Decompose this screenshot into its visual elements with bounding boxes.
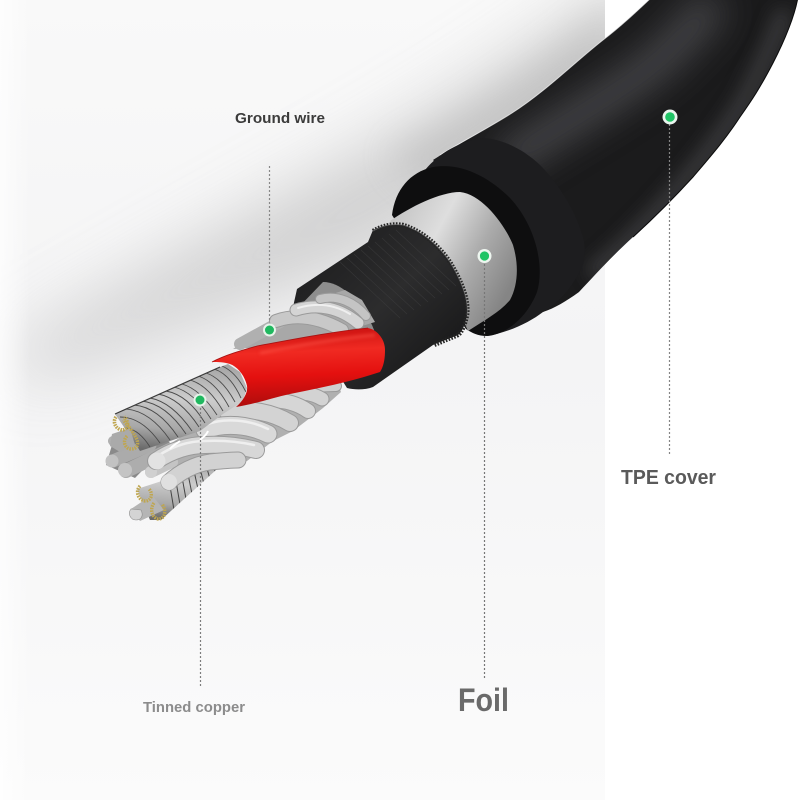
red insulated wire	[212, 328, 385, 407]
ground wire strands, upper twist	[233, 282, 380, 349]
outer sleeve band	[425, 138, 585, 336]
marker dot: ground wire	[263, 324, 276, 336]
marker dot: TPE cover	[662, 110, 678, 124]
black braided shield	[293, 225, 467, 389]
lower strand bundle	[150, 382, 341, 477]
marker dot: foil	[478, 249, 492, 263]
second black sleeve end	[392, 166, 540, 336]
marker dot: tinned copper	[194, 394, 206, 406]
leader line: ground wire	[268, 166, 270, 322]
leader line: tinned copper	[200, 408, 202, 686]
label: Foil: Foil	[458, 682, 509, 718]
first tinned copper conductor	[110, 364, 247, 452]
label: TPE cover: TPE cover	[621, 467, 716, 489]
leader line: TPE cover	[668, 124, 670, 455]
foil shield	[390, 192, 517, 331]
leader line: foil	[484, 264, 486, 680]
panel: right white background	[605, 0, 800, 800]
second tinned copper conductor	[129, 470, 216, 521]
label: Ground wire: Ground wire	[235, 111, 325, 127]
label: Tinned copper: Tinned copper	[143, 699, 245, 716]
TPE cover cable body	[425, 0, 798, 336]
panel: light left background	[0, 0, 640, 800]
inner rods of the bare bundle	[106, 428, 256, 490]
